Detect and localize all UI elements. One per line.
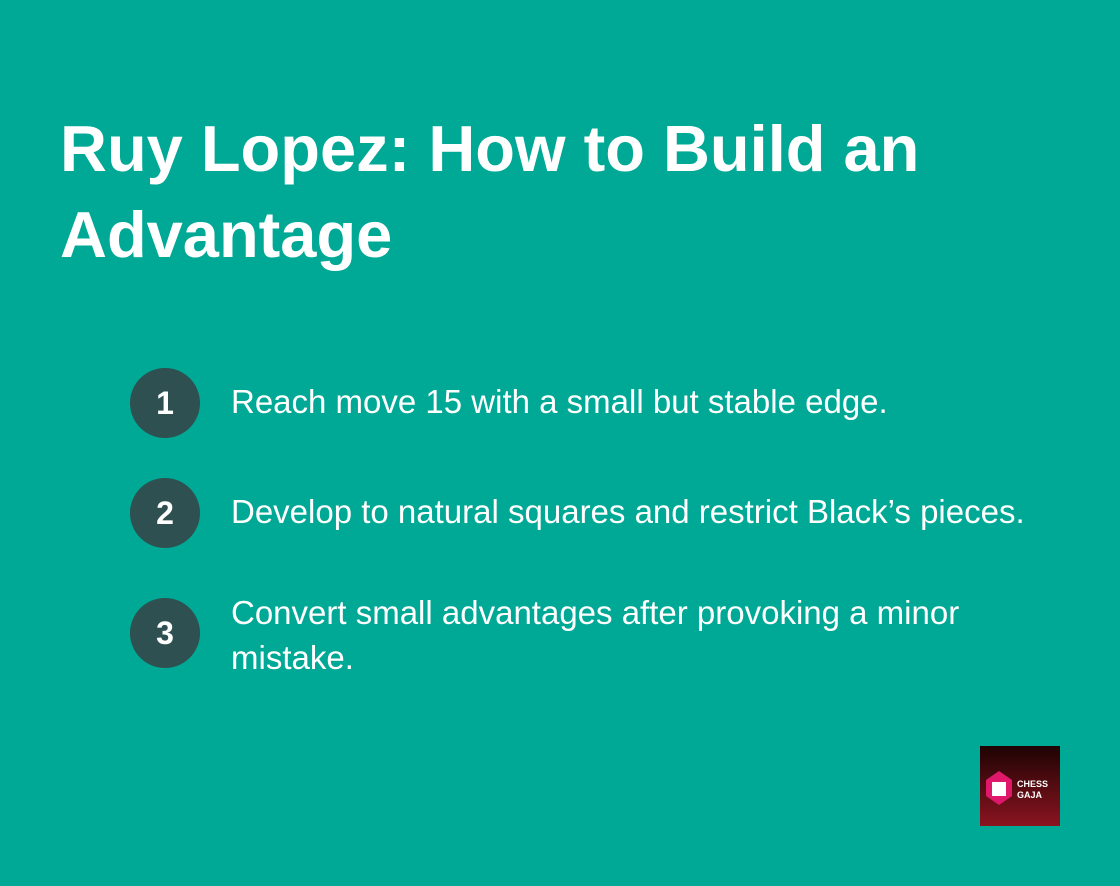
item 3 bbox=[130, 594, 959, 676]
logo icon: CHESS bbox=[1017, 779, 1048, 789]
text 1: Reach move 15 with a small but stable edge. bbox=[231, 383, 888, 420]
badge 3 bbox=[130, 598, 200, 668]
logo icon: GAJA bbox=[1017, 790, 1043, 800]
badge 2: 2 bbox=[156, 495, 174, 531]
badge 3: 3 bbox=[156, 615, 174, 651]
text 2: Develop to natural squares and restrict Black’s pieces. bbox=[231, 493, 1025, 530]
badge 1: 1 bbox=[156, 385, 174, 421]
text 3: Convert small advantages after provoking a minor mistake. bbox=[231, 594, 959, 676]
badge 2 bbox=[130, 478, 200, 548]
logo icon bbox=[986, 771, 1048, 805]
item 1 bbox=[130, 368, 888, 438]
title: Ruy Lopez: How to Build an Advantage bbox=[60, 112, 919, 271]
logo bbox=[980, 746, 1060, 826]
item 2 bbox=[130, 478, 1025, 548]
badge 1 bbox=[130, 368, 200, 438]
